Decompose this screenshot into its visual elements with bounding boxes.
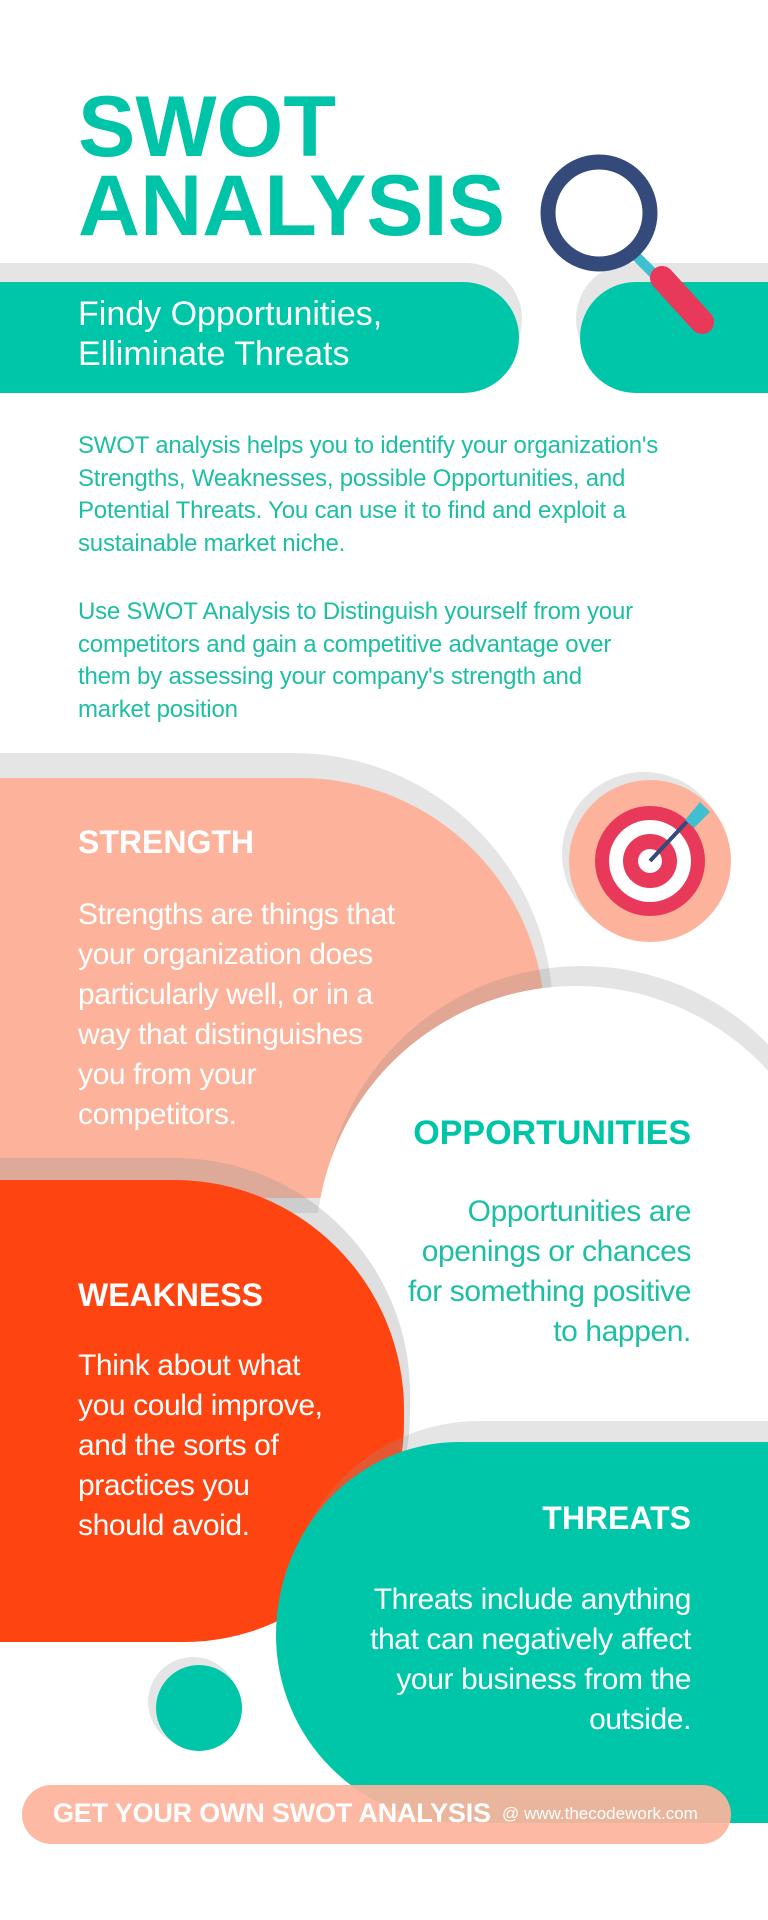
- subtitle: Elliminate Threats: [78, 335, 350, 373]
- title: SWOT: [78, 79, 336, 175]
- text: threats: outside.: [589, 1703, 691, 1736]
- strength shadow: [0, 753, 553, 1213]
- text: opportunities: for something positive: [408, 1275, 691, 1308]
- text: strength: your organization does: [78, 938, 373, 971]
- cta text: GET YOUR OWN SWOT ANALYSIS: [53, 1798, 491, 1828]
- text: strength: particularly well, or in a: [78, 978, 373, 1011]
- opportunities shadow: [322, 966, 768, 1606]
- intro text: them by assessing your company's strength and: [78, 663, 582, 690]
- text: strength: Strengths are things that: [78, 898, 395, 931]
- subtitle: Findy Opportunities,: [78, 295, 382, 333]
- text: threats: that can negatively affect: [370, 1623, 691, 1656]
- intro text: competitors and gain a competitive advantage over: [78, 630, 611, 658]
- intro text: [78, 432, 658, 722]
- subtitle: [78, 295, 382, 373]
- heading: weakness: WEAKNESS: [78, 1277, 263, 1313]
- title: ANALYSIS: [78, 158, 505, 254]
- text: threats: [370, 1583, 692, 1736]
- text: threats: your business from the: [396, 1663, 691, 1696]
- heading: opportunities: OPPORTUNITIES: [413, 1114, 691, 1152]
- text: weakness: [78, 1349, 323, 1542]
- text: weakness: and the sorts of: [78, 1429, 278, 1462]
- heading: strength: STRENGTH: [78, 824, 254, 860]
- intro text: Strengths, Weaknesses, possible Opportunities, and: [78, 464, 625, 492]
- text: threats: Threats include anything: [374, 1583, 691, 1616]
- text: opportunities: [408, 1195, 691, 1348]
- text: weakness: practices you: [78, 1469, 250, 1502]
- panel: opportunities: [316, 986, 768, 1626]
- intro text: market position: [78, 696, 238, 722]
- panel: weakness: [0, 1180, 404, 1642]
- subtitle band: [0, 282, 519, 393]
- intro text: Potential Threats. You can use it to find and exploit a: [78, 497, 626, 524]
- text: strength: competitors.: [78, 1098, 237, 1131]
- weakness shadow: [0, 1158, 410, 1642]
- title: [78, 79, 505, 254]
- intro text: Use SWOT Analysis to Distinguish yourself from your: [78, 598, 633, 625]
- text: strength: [78, 898, 395, 1131]
- heading: threats: THREATS: [542, 1500, 691, 1536]
- panel: threats: [276, 1442, 768, 1823]
- panel: strength: [0, 778, 545, 1198]
- text: opportunities: to happen.: [553, 1315, 691, 1348]
- text: strength: way that distinguishes: [78, 1018, 363, 1051]
- threats shadow: [284, 1421, 768, 1821]
- text: strength: you from your: [78, 1058, 256, 1091]
- text: weakness: you could improve,: [78, 1389, 323, 1422]
- icon: magnifier: [540, 154, 714, 334]
- website: @ www.thecodework.com: [502, 1804, 698, 1823]
- text: opportunities: Opportunities are: [468, 1195, 691, 1228]
- subtitle band shadow: [0, 263, 522, 375]
- decorative teal circle: [148, 1657, 242, 1751]
- right band: [580, 282, 768, 393]
- intro text: SWOT analysis helps you to identify your organization's: [78, 432, 658, 459]
- intro text: sustainable market niche.: [78, 530, 345, 556]
- call to action bar: [22, 1785, 731, 1844]
- right band shadow: [576, 263, 768, 375]
- text: weakness: Think about what: [78, 1349, 300, 1382]
- text: opportunities: openings or chances: [422, 1235, 691, 1268]
- icon: target: [562, 772, 731, 942]
- text: weakness: should avoid.: [78, 1509, 250, 1542]
